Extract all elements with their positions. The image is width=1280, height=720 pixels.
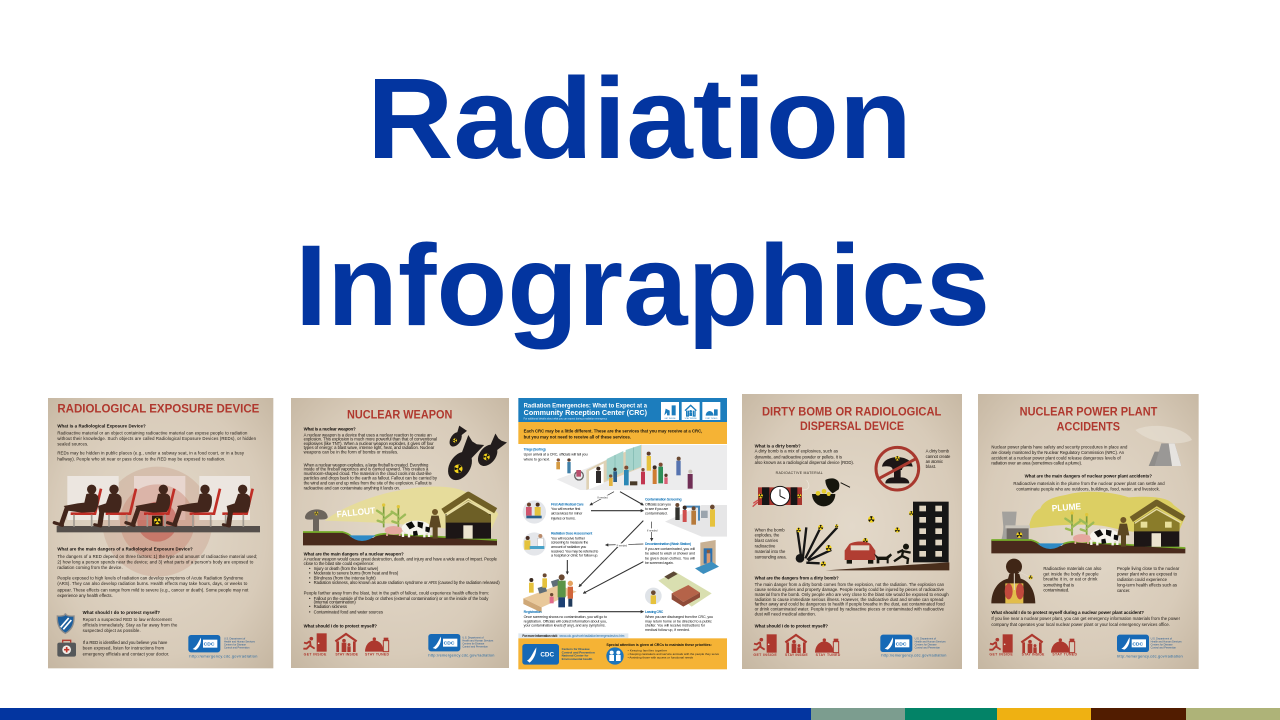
text block: inside the body: Radioactive materials can also [1043,566,1102,571]
callout: each CRC may be different [518,422,727,444]
text block: when the bomb explodes: radioactive [755,543,776,548]
text block: dose assessment: Radiation Dose Assessment [551,532,593,536]
illustration: fallout scene [303,487,498,545]
illustration: body with lungs [991,559,1035,603]
header band: For additional details about what you can expect during a radiation emergency [524,418,608,421]
text block: what is a dirty bomb: A dirty bomb is a mix of explosives, such as [755,449,838,454]
icons: get inside, stay inside, stay tuned: GET INSIDE [753,653,777,657]
text block: main dangers of RED [57,547,257,598]
text block: what is a RED: without their knowledge. Such objects are called Radiological Exposure Devices (REDs), or hidden [57,436,257,441]
text block: main dangers of RED: People exposed to high levels of radiation can develop symptoms of Acute Radiation Syndrome [57,575,244,580]
text block: contamination screening: to see if you are [645,507,668,511]
CDC logo: http://emergency.cdc.gov/radiation [428,654,494,658]
text block: main dangers of RED: The dangers of a RED depend on three factors: 1) the type and amount of radioactive material used; [57,554,257,559]
text block: dangers of nuclear weapon: Moderate to severe burns (from heat and fires) [314,571,399,576]
text block: protect yourself [83,610,178,633]
header band: Community Reception Center (CRC) [524,410,647,417]
CDC logo: Centers for Disease [462,643,485,646]
text block: dangers of a dirty bomb: What are the dangers from a dirty bomb? [755,575,839,580]
illustration: dose assessment [523,532,546,556]
text block: what is a RED: sealed sources. [57,441,88,446]
footer band with CDC logo and priorities: • Assisting those with access or functional needs [628,656,693,660]
header band: STAY INSIDE [685,417,697,420]
illustration: leaving CRC [645,571,712,607]
icon: cooling towers [1135,426,1192,466]
icons: get inside, stay inside, stay tuned: STAY INSIDE [785,653,808,657]
text block: dangers of nuclear weapon: What are the main dangers of a nuclear weapon? [304,552,404,557]
icons: get inside, stay inside, stay tuned: GET INSIDE [989,653,1013,657]
CDC logo: Health and Human Services [462,640,494,643]
text block: long-term effects: cancer. [1117,588,1130,593]
text block: long-term effects: radiation could experience [1117,577,1168,582]
text block: protect yourself: suspected object as possible. [83,628,141,633]
text block: main dangers of RED: What are the main dangers of a Radiological Exposure Device? [57,547,193,552]
text block: dangers of a dirty bomb: farther away and could be dangerous to health if people breathe in the dust, eat contaminated food [755,602,945,607]
text block: dangers of a dirty bomb: cause serious injuries and property damage. People nearby could be injured by pieces of radioactive [755,587,945,592]
text block: triage: Triage (Sorting) [524,448,546,452]
text block: protect during accident: If you live near a nuclear power plant, you can get emergency information materials from the power [991,616,1181,621]
title: Radiation [367,55,912,183]
icon: dynamite bomb with clock [753,480,809,507]
text block: protect yourself: officials immediately. Stay as far away from the [83,622,178,627]
panel: radiological exposure device poster [48,398,273,668]
text block: dangers of a dirty bomb: dust will need medical attention. [755,612,816,617]
text block: intro: are closely monitored by the Nuclear Regulatory Commission (NRC). An [991,450,1125,455]
CDC logo: Control and Prevention [462,646,488,649]
text block: dangers of nuclear weapon: • [309,575,311,580]
illustration: first aid [523,500,546,524]
text block: dangers of a dirty bomb: material from the bomb. Only people who are very close to the blast site would be exposed to enough [755,592,949,597]
text block: what is a nuclear weapon: explosives (like TNT). When a nuclear weapon explodes, it gives off four [304,441,434,446]
text block: if exposed: If a RED is identified and you believe you have [83,640,168,645]
footer band with CDC logo and priorities: Centers for Disease [562,647,590,651]
text block: intro: accident at a nuclear power plant could release dangerous levels of [991,455,1121,460]
footer band with CDC logo and priorities: National Center for [562,654,589,658]
CDC logo: http://emergency.cdc.gov/radiation [189,655,257,659]
footer band with CDC logo and priorities: • Keeping caretakers and service animals with the people they serve [628,652,719,656]
panel: nuclear weapon poster [291,398,509,668]
icons: get inside, stay inside, stay tuned: STAY TUNED [816,653,841,657]
text block: dangers of a dirty bomb: radiation to cause immediate serious illness. However, the radioactive dust and smoke can spread [755,597,944,602]
CDC logo: Health and Human Services [224,640,256,643]
text block: when the bomb explodes [755,527,787,560]
header band: Radiation Emergencies: What to Expect at a [524,403,648,409]
text block: contamination screening [645,497,682,515]
text block: main dangers: Radioactive materials in the plume from the nuclear power plant can settle and [1013,481,1165,486]
text block: first aid: aid services for minor [551,512,583,516]
text block: leaving CRC [645,610,713,632]
text block: dose assessment: a hospital or clinic for follow up. [551,554,598,558]
text block: main dangers: What are the main dangers of nuclear power plant accidents? [1025,474,1152,479]
icons: get inside, stay inside, stay tuned: STAY TUNED [1052,653,1077,657]
text block: what is a dirty bomb: What is a dirty bomb? [755,443,801,448]
CDC logo [428,634,494,658]
title: Infographics [295,222,990,350]
illustration: triage entrance and crowd [556,445,727,490]
text block: what is a dirty bomb [755,443,854,475]
icon: first aid kit [57,640,76,657]
heading: dirty bomb [762,404,941,433]
text block: when the bomb explodes: surrounding area. [755,555,787,560]
text block: dangers of nuclear weapon: • [309,604,311,609]
text block: what is a nuclear weapon: weapons can be in the form of bombs or missiles. [304,449,398,454]
text block: what is a nuclear weapon: particles and drops back to the earth as fallout. Fallout can be carried by [304,475,438,480]
text block: protect during accident [991,610,1181,627]
CDC logo: CDC [204,642,215,648]
text block: dangers of a dirty bomb: or drink contaminated water. People injured by radioactive pieces or contaminated with radioactive [755,607,945,612]
text block: contamination screening: Contamination Screening [645,497,682,501]
text block: protect during accident: What should I do to protect myself during a nuclear power plant accident? [991,610,1144,615]
text block: what is a nuclear weapon: radioactive and can contaminate anything it lands on. [304,485,400,490]
callout: each CRC may be different: Each CRC may be a little different. These are the services that you may receive at a CRC, [524,428,702,433]
text block: cannot create blast [926,449,951,469]
text block: protect yourself: Report a suspected RED to law enforcement [83,617,172,622]
header band [518,398,727,422]
text block: long-term effects: power plant who are exposed to [1117,571,1178,576]
icons: get inside, stay inside, stay tuned: STAY INSIDE [1022,653,1045,657]
text block: triage [524,448,588,461]
text block: what is a nuclear weapon: A nuclear weapon is a device that uses a nuclear reaction to create an [304,432,432,437]
icons: get inside, stay inside, stay tuned [303,633,389,656]
icons: get inside, stay inside, stay tuned: STAY TUNED [365,652,389,656]
text block: dangers of nuclear weapon: Injury or death (from the blast wave) [314,566,379,571]
text block: when the bomb explodes: material into the [755,549,786,554]
text block: decontamination: be screened again. [645,561,674,565]
footer colour bar [0,708,1280,720]
text block: contamination screening: contaminated. [645,511,668,515]
text block: triage: Upon arrival at a CRC, officials will tell you [524,452,588,456]
CDC logo: CDC [444,641,455,647]
text block: when the bomb explodes: explodes, the [755,533,780,538]
text block: cannot create blast: A dirty bomb [926,449,950,454]
text block: dangers of nuclear weapon: Contaminated food and water sources [314,609,383,614]
text block: dangers of nuclear weapon: Fallout on the outside of the body or clothes (external contamination) or on the inside of the body [314,596,489,601]
text block: what is a nuclear weapon: types of energy: a blast wave, intense light, heat, and radiation. Nuclear [304,445,435,450]
CDC logo [1117,635,1183,659]
CDC logo: U.S. Department of [1151,637,1172,640]
icon: shield [57,613,74,633]
text block: what is a nuclear weapon: the wind and can end up miles from the site of the explosion. Fallout is [304,480,432,485]
text block: inside the body: something that is [1043,582,1074,587]
CDC logo: CDC [896,641,907,647]
text block: dangers of nuclear weapon: Radiation sickness [314,604,347,609]
footer band with CDC logo and priorities: • Keeping families together [628,648,667,652]
text block: decontamination [645,542,695,565]
icons: get inside, stay inside, stay tuned [753,634,841,657]
text block: dangers of nuclear weapon: close to the blast site could experience: [304,561,374,566]
illustration: explosion and debris [796,511,914,567]
footer band with CDC logo and priorities [518,638,727,669]
text block: dangers of nuclear weapon: • [309,571,311,576]
CDC logo: Health and Human Services [915,640,946,643]
text block: intro: radiation over an area (sometimes called a plume). [991,461,1082,466]
icon: no atomic blast [876,447,919,490]
text block: registration: your contamination levels (if any), and any symptoms. [524,624,606,628]
text block: long-term effects: long-term health effects such as [1117,583,1177,588]
if needed labels: If needed [597,496,608,499]
text block: decontamination: If you are contaminated, you will [645,547,695,551]
heading: nuclear power plant accidents [1020,404,1158,434]
text block: what is a nuclear weapon [304,427,438,490]
text block: first aid: injuries or burns. [551,516,576,520]
text block: leaving CRC: may return home or be directed to a public [645,619,712,623]
CDC logo [880,635,946,658]
footer band with CDC logo and priorities: Control and Prevention [562,650,595,654]
more information strip: www.cdc.gov/nceh/radiation/emergencies/crc.htm [559,634,625,638]
text block: intro: Nuclear power plants have safety and security procedures in place and [991,445,1128,450]
more information strip: For more information visit: [522,634,558,638]
icons: get inside, stay inside, stay tuned [989,634,1077,657]
text block: long-term effects [1117,566,1180,593]
text block: main dangers: contaminate people who are outdoors, buildings, food, water, and livestock. [1016,487,1160,492]
text block: first aid [551,502,584,520]
text block: decontamination: Decontamination (Wash Station) [645,542,691,546]
header band: STAY TUNED [705,417,718,420]
icon: radioactive bowl and rat [812,478,850,506]
text block: dangers of nuclear weapon: • [309,596,311,601]
illustration: plume scene [991,492,1185,553]
CDC logo: Control and Prevention [224,646,250,649]
text block: dangers of nuclear weapon [304,552,500,628]
text block: dangers of nuclear weapon: Blindness (from the intense light) [314,575,376,580]
text block: inside the body: get inside the body if people [1043,571,1099,576]
if needed labels [596,495,658,547]
CDC logo: Centers for Disease [224,643,247,646]
footer band with CDC logo and priorities: Environmental Health [562,657,593,661]
panel: dirty bomb poster [742,394,962,669]
illustration: car, dog, runner, building [825,502,949,570]
CDC logo: http://emergency.cdc.gov/radiation [881,654,946,658]
text block: dangers of nuclear weapon: • [309,609,311,614]
text block: what is a nuclear weapon: When a nuclear weapon explodes, a large fireball is created. Everything [304,462,429,467]
text block: dangers of a dirty bomb: The main danger from a dirty bomb comes from the explosion, not the radiation. The explosion can [755,582,945,587]
text block: first aid: You will receive first [551,507,580,511]
CDC logo: Control and Prevention [915,646,941,649]
illustration: plume scene: PLUME [1051,501,1081,513]
icons: get inside, stay inside, stay tuned: STAY INSIDE [335,652,359,656]
illustration: contamination screening [665,503,727,537]
CDC logo: Centers for Disease [1151,643,1173,646]
text block: cannot create blast: an atomic [926,459,944,464]
text block: cannot create blast: cannot create [926,454,951,459]
text block: dangers of nuclear weapon: People farther away from the blast, but in the path of fallout, could experience health effects from: [304,591,489,596]
callout: each CRC may be different: but you may not need to receive all of these services. [524,435,631,440]
text block: registration: Once screening shows no contamination, you will go to [524,615,607,619]
heading: dirty bomb: DISPERSAL DEVICE [800,419,904,433]
text block: dose assessment: You will receive further [551,536,586,540]
text block: registration: Registration [524,610,542,614]
text block: what is a RED: REDs may be hidden in public places (e.g., under a subway seat, in a food court, or in a busy [57,451,245,456]
CDC logo: U.S. Department of [224,637,246,640]
text block: registration [524,610,607,628]
text block: leaving CRC: shelter. You will receive instructions for [645,624,706,628]
text block: dangers of a dirty bomb [755,575,949,628]
text block: what is a dirty bomb: dynamite, and radioactive powder or pellets. It is [755,454,842,459]
header band: GET INSIDE [664,418,676,420]
text block: dangers of nuclear weapon: What should I do to protect myself? [304,623,377,628]
CDC logo: http://emergency.cdc.gov/radiation [1117,655,1183,659]
text block: dose assessment [551,532,598,558]
text block: what is a dirty bomb: also known as a radiological dispersal device (RDD). [755,460,854,465]
text block: leaving CRC: medical follow up, if needed. [645,628,690,632]
text block: main dangers of RED: radiation coming from the device. [57,565,123,570]
text block: dangers of nuclear weapon: • [309,566,311,571]
text block: dangers of a dirty bomb: What should I do to protect myself? [755,623,828,628]
text block: inside the body [1043,566,1102,593]
illustration: wash station [695,540,719,574]
text block: intro [991,445,1128,466]
text block: dose assessment: received. You may be referred to [551,549,598,553]
icon: falling bombs [443,425,508,484]
heading: nuclear power plant accidents: NUCLEAR POWER PLANT [1020,404,1158,418]
if needed labels: If needed [617,544,628,547]
text block: decontamination: be given clean clothes. You will [645,556,695,560]
text block: main dangers of RED: appear. These effects can range from mild to severe (e.g., cancer or death). Some people may not [57,588,249,593]
text block: what is a RED: hallway). People who sit near or pass close to the RED may be exposed to radiation. [57,457,225,462]
text block: protect during accident: company that operates your local nuclear power plant or your local emergency services office. [991,622,1170,627]
illustration: registration desk [523,573,577,613]
text block: what is a nuclear weapon: explosion. This explosion is much more powerful than that of conventional [304,437,437,442]
CDC logo: Centers for Disease [915,643,937,646]
text block: inside the body: breathe it in, or eat or drink [1043,577,1098,582]
CDC logo: Health and Human Services [1151,640,1182,643]
text block: what is a RED: Radioactive material or an object containing radioactive material can expose people to radiation [57,431,248,436]
text block: main dangers of RED: 2) how long a person spends near the device; and 3) what parts of a person's body are exposed to [57,559,254,564]
text block: what is a RED: What is a Radiological Exposure Device? [57,423,146,428]
more information strip [518,633,628,638]
text block: if exposed [83,640,169,656]
text block: contamination screening: Officials scan you [645,502,671,506]
heading: nuclear weapon: NUCLEAR WEAPON [347,407,452,421]
CDC logo: U.S. Department of [915,637,936,640]
text block: what is a nuclear weapon: inside of the fireball vaporizes and is carried upward. This creates a [304,467,429,472]
text block: decontamination: be asked to wash or shower and [645,552,695,556]
text block: if exposed: emergency officials and contact your doctor. [83,651,169,656]
icons: get inside, stay inside, stay tuned: GET INSIDE [304,652,327,656]
text block: dangers of nuclear weapon: Radiation sickness, also known as acute radiation syndrome or ARS (caused by the radiation released) [314,580,500,585]
text block: first aid: First Aid/ Medical Care [551,502,584,506]
text block: what is a nuclear weapon: mushroom-shaped cloud. The material in the cloud cools into dust-like [304,471,432,476]
text block: dangers of nuclear weapon: A nuclear weapon would cause great destruction, death, and injury and have a wide area of impact. People [304,557,498,562]
text block: registration: registration. Officials will collect information about you, [524,619,607,623]
text block: main dangers [1013,474,1165,492]
text block: protect yourself: What should I do to protect myself? [83,610,160,615]
CDC logo: Control and Prevention [1151,646,1177,649]
heading: dirty bomb: DIRTY BOMB OR RADIOLOGICAL [762,404,941,418]
footer band with CDC logo and priorities: CDC [540,652,554,659]
if needed labels: If needed [647,529,658,532]
text block: triage: where to go next. [524,457,550,461]
text block: cannot create blast: blast. [926,464,936,469]
arrows between services [567,492,652,612]
text block: if exposed: been exposed, listen for instructions from [83,646,164,651]
CDC logo: U.S. Department of [462,637,484,640]
text block: leaving CRC: When you are discharged from the CRC, you [645,615,713,619]
illustration: fallout scene: FALLOUT [336,505,376,519]
text block: main dangers of RED: experience any health effects. [57,593,113,598]
text block: dangers of nuclear weapon: (internal contamination) [314,600,356,605]
heading: radiological exposure device: RADIOLOGICAL EXPOSURE DEVICE [57,402,259,416]
text block: leaving CRC: Leaving CRC [645,610,664,614]
CDC logo [188,635,257,659]
text block: what is a RED [57,423,257,462]
text block: when the bomb explodes: When the bomb [755,527,785,532]
CDC logo: CDC [1132,641,1144,647]
text block: what is a dirty bomb: RADIOACTIVE MATERIAL [776,471,823,475]
title [295,55,990,350]
panel: nuclear power plant poster [978,394,1199,669]
text block: dangers of nuclear weapon: • [309,580,311,585]
panel: community reception center poster [518,398,727,669]
text block: long-term effects: People living close to the nuclear [1117,566,1180,571]
heading: nuclear power plant accidents: ACCIDENTS [1057,420,1120,434]
text block: dose assessment: amount of radiation you [551,545,586,549]
text block: inside the body: contaminated. [1043,588,1069,593]
footer band with CDC logo and priorities: Special attention is given at CRCs to maintain these priorities: [606,643,712,647]
text block: what is a nuclear weapon: What is a nuclear weapon? [304,427,356,432]
text block: main dangers of RED: (ARS). They can also develop radiation burns. Health effects may take hours, days, or weeks to [57,581,248,586]
text block: dose assessment: screening to measure the [551,541,588,545]
illustration: seated people around hidden device [54,467,260,577]
text block: when the bomb explodes: blast carries [755,538,778,543]
